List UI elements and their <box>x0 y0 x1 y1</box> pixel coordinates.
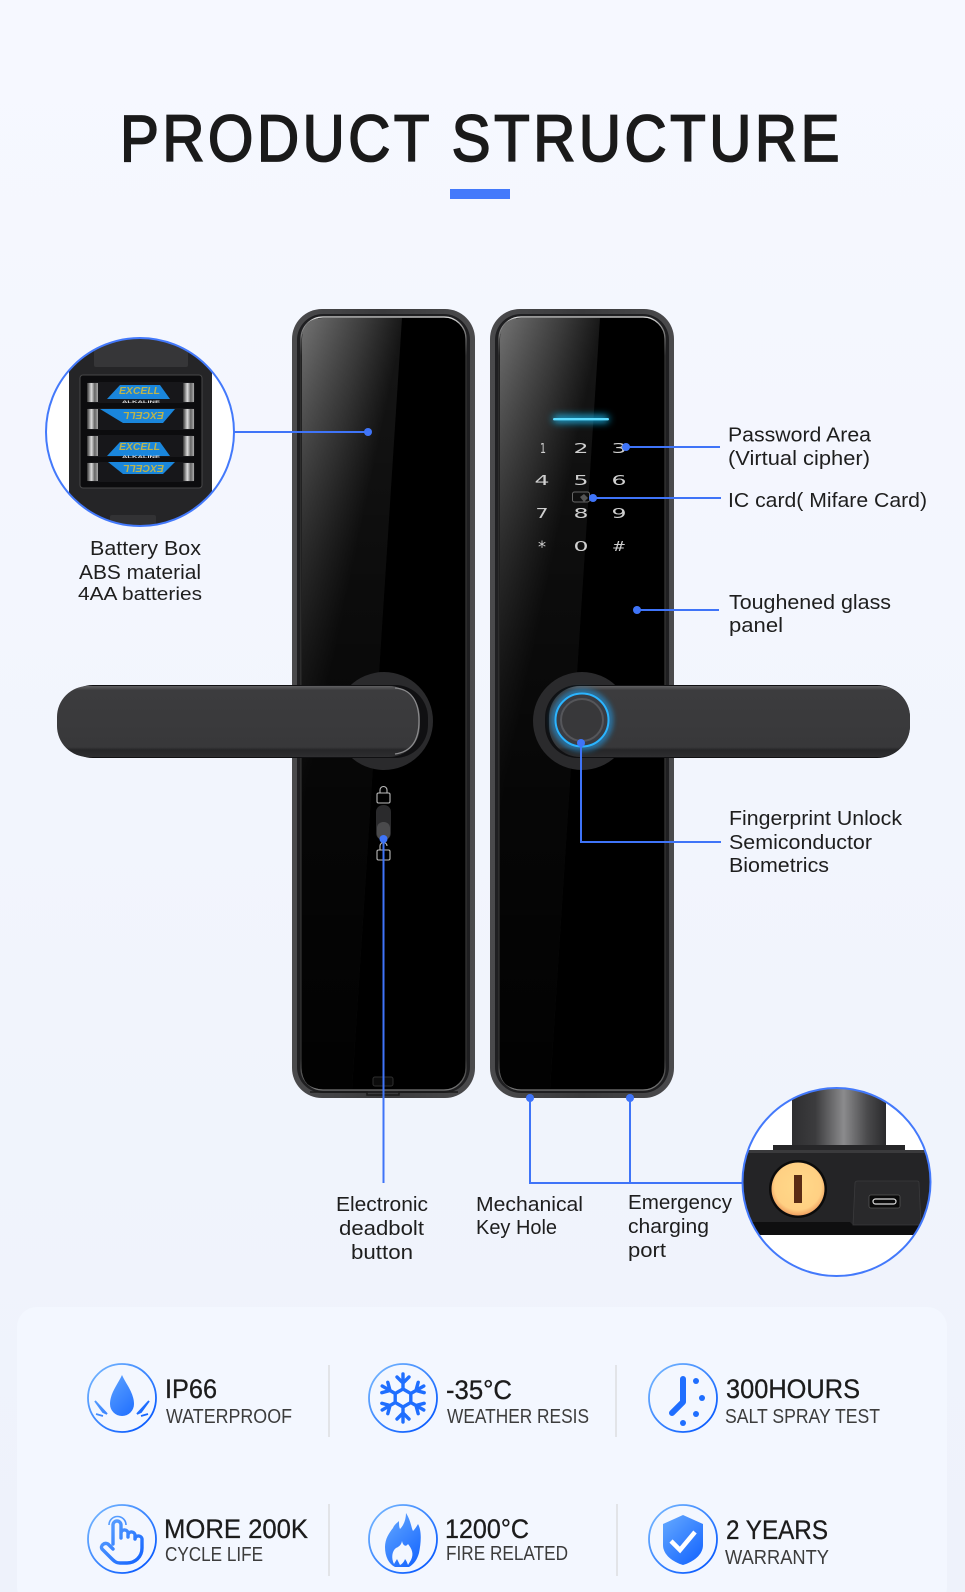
panel: product specifications <box>17 1307 947 1592</box>
spec: cycle life: CYCLE LIFE <box>165 1544 263 1566</box>
battery 1: ALKALINE <box>122 399 161 404</box>
label: deadbolt: deadbolt <box>339 1218 424 1240</box>
keypad: 3 <box>612 442 626 457</box>
battery 4 <box>87 462 195 482</box>
title accent bar <box>450 189 510 199</box>
leader line: fingerprint <box>577 739 721 842</box>
label: charging port: charging <box>628 1216 709 1238</box>
spec: waterproof: IP66 <box>165 1374 217 1404</box>
label: battery box: Battery Box <box>90 538 201 560</box>
icon: clock <box>649 1364 717 1432</box>
label: password area <box>728 424 872 470</box>
leader line: deadbolt <box>380 835 388 1183</box>
keypad: # <box>612 540 626 555</box>
indicator light <box>553 416 609 422</box>
spec: salt spray: 300HOURS <box>726 1374 860 1404</box>
left handle <box>57 672 433 770</box>
label: toughened glass <box>729 592 891 637</box>
leader line: password area <box>622 443 720 451</box>
icon: snowflake <box>369 1364 437 1432</box>
USB port <box>853 1181 921 1225</box>
label: toughened glass: Toughened glass <box>729 592 891 614</box>
spec: warranty: WARRANTY <box>725 1547 829 1569</box>
label: battery box: 4AA batteries <box>78 583 202 604</box>
keypad: 6 <box>612 474 626 489</box>
label: IC card: IC card( Mifare Card) <box>728 490 927 512</box>
label: deadbolt <box>336 1194 428 1264</box>
label: fingerprint <box>729 808 903 877</box>
label: password area: Password Area <box>728 424 872 446</box>
battery 2 <box>87 408 195 430</box>
keypad: 2 <box>574 442 588 457</box>
key hole <box>769 1160 827 1218</box>
spec: fire resistance: 1200°C <box>445 1514 529 1544</box>
right handle with fingerprint reader <box>533 672 910 770</box>
spec: waterproof <box>88 1364 292 1432</box>
bottom detail <box>310 1077 458 1095</box>
label: charging port <box>628 1192 732 1262</box>
label: toughened glass: panel <box>729 615 783 637</box>
label: charging port: port <box>628 1240 666 1262</box>
keypad: 7 <box>536 507 548 522</box>
icon: pressing hand <box>88 1505 156 1573</box>
spec: fire resistance <box>369 1505 568 1573</box>
label: fingerprint: Biometrics <box>729 855 829 877</box>
spec: weather resistance: -35°C <box>446 1375 512 1405</box>
label: password area: (Virtual cipher) <box>728 448 870 470</box>
label: key hole: Mechanical <box>476 1194 583 1216</box>
title: PRODUCT STRUCTURE <box>120 101 843 175</box>
keypad: * <box>538 537 546 556</box>
spec: weather resistance <box>369 1364 589 1432</box>
label: charging port: Emergency <box>628 1192 732 1214</box>
keypad: 4 <box>534 474 550 489</box>
lock slider icons <box>376 786 391 860</box>
spec: fire resistance: FIRE RELATED <box>446 1543 568 1565</box>
icon: shield <box>649 1505 717 1573</box>
battery 1: EXCELL <box>119 386 160 397</box>
spec: weather resistance: WEATHER RESIS <box>447 1406 589 1428</box>
icon: flame <box>369 1505 437 1573</box>
spec: warranty: 2 YEARS <box>726 1515 828 1545</box>
keypad: 5 <box>574 474 588 489</box>
label: deadbolt: Electronic <box>336 1194 428 1216</box>
label: battery box: ABS material <box>79 562 201 584</box>
leader line: glass panel <box>633 606 719 614</box>
spec: salt spray: SALT SPRAY TEST <box>725 1406 880 1428</box>
icon: water drop <box>88 1364 156 1432</box>
spec: waterproof: WATERPROOF <box>166 1406 292 1428</box>
battery 3 <box>87 435 195 459</box>
leader line: IC card <box>589 494 721 502</box>
battery 3: ALKALINE <box>122 454 161 459</box>
callout: key hole and USB port <box>740 1085 935 1276</box>
leader line: battery <box>234 428 372 436</box>
battery 1 <box>87 382 195 404</box>
battery 4: EXCELL <box>123 462 164 473</box>
callout: battery box <box>46 330 234 540</box>
right lock panel <box>490 309 674 1098</box>
battery 3: EXCELL <box>119 442 160 453</box>
label: fingerprint: Semiconductor <box>729 832 872 854</box>
keypad: 0 <box>574 540 588 555</box>
label: key hole <box>476 1194 583 1239</box>
spec: salt spray <box>649 1364 880 1432</box>
spec: cycle life: MORE 200K <box>164 1514 308 1544</box>
label: fingerprint: Fingerprint Unlock <box>729 808 903 830</box>
keypad <box>534 442 626 556</box>
label: deadbolt: button <box>351 1242 413 1264</box>
keypad: 9 <box>612 507 626 522</box>
spec: cycle life <box>88 1505 308 1573</box>
keypad: 8 <box>574 507 588 522</box>
fingerprint sensor ring <box>554 692 610 748</box>
leader lines: key hole and charging port <box>526 1094 743 1183</box>
keypad: 1 <box>540 442 546 457</box>
spec: warranty <box>649 1505 829 1573</box>
left lock panel <box>292 309 475 1098</box>
battery 2: EXCELL <box>123 409 164 420</box>
label: battery box <box>78 538 202 604</box>
label: key hole: Key Hole <box>476 1217 557 1239</box>
